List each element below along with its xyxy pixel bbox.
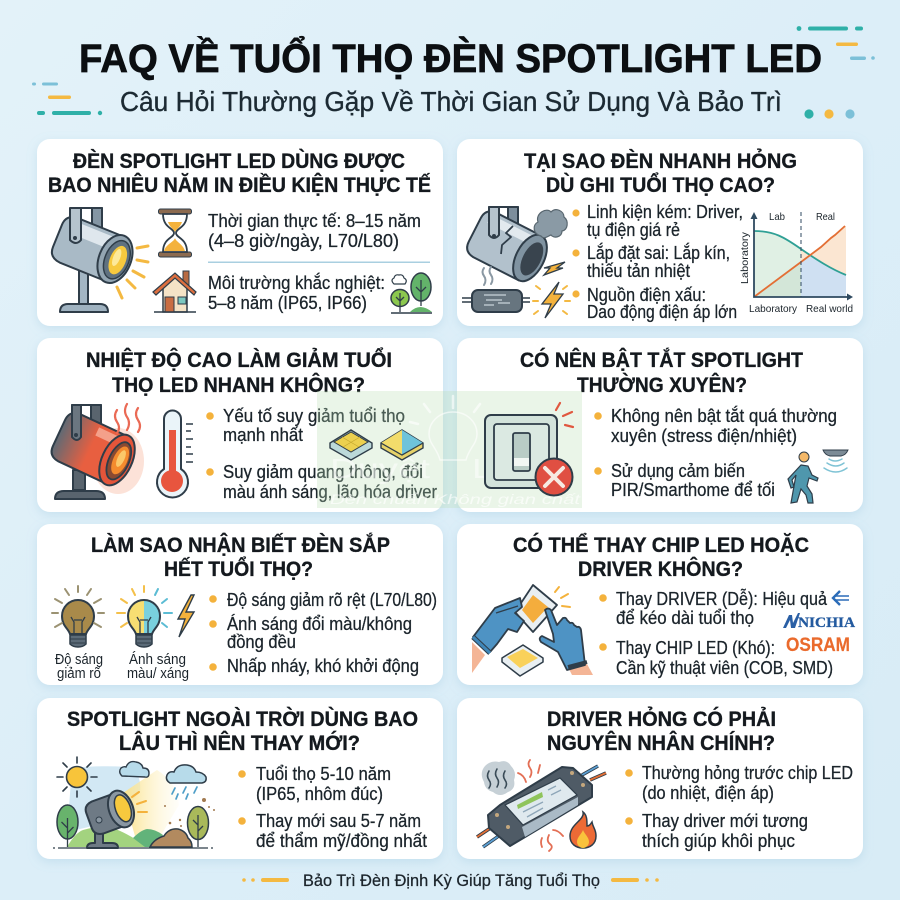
heading: DRIVER KHÔNG? <box>578 557 743 581</box>
panel: why lamps fail early <box>457 139 863 326</box>
heading <box>48 149 431 197</box>
text: real time <box>208 211 421 251</box>
heading: LÀM SAO NHẬN BIẾT ĐÈN SẮP <box>91 533 390 557</box>
caption: dim <box>55 652 103 682</box>
icon: dim bulb <box>52 586 104 647</box>
icon: colour-shift bulb <box>117 586 172 647</box>
heading: HẾT TUỔI THỌ? <box>164 557 313 581</box>
icon: flicker lightning bolt <box>178 595 194 637</box>
caption: dim: giảm rõ <box>57 666 101 682</box>
heading <box>67 707 418 755</box>
panel: driver failure <box>457 698 863 859</box>
text: driver list: Thường hỏng trước chip LED <box>642 763 853 783</box>
text: replacement list <box>599 588 833 678</box>
text: real time: Thời gian thực tế: 8–15 năm <box>208 211 421 231</box>
subtitle: Câu Hỏi Thường Gặp Về Thời Gian Sử Dụng Và Bảo Trì <box>120 86 782 117</box>
icon: outdoor scene with spotlight <box>53 757 215 848</box>
text: real time: (4–8 giờ/ngày, L70/L80) <box>208 231 399 251</box>
decorative accents: top left <box>32 82 102 115</box>
icon: spotlight <box>48 208 148 312</box>
watermark: Duyệt <box>330 453 430 484</box>
icon: driver and lightning <box>462 282 570 318</box>
icon: house <box>153 271 196 312</box>
text: switching list <box>594 405 837 500</box>
logo: Nichia <box>783 613 855 631</box>
chart: lab vs real world: Real <box>816 211 835 223</box>
heading: BAO NHIÊU NĂM IN ĐIỀU KIỆN THỰC TẾ <box>48 173 431 197</box>
heading: CÓ NÊN BẬT TẮT SPOTLIGHT <box>520 348 803 372</box>
text: signs list <box>209 590 437 676</box>
heading: NGUYÊN NHÂN CHÍNH? <box>547 731 775 755</box>
heading: TẠI SAO ĐÈN NHANH HỎNG <box>524 149 797 173</box>
text: heat list: mạnh nhất <box>223 425 303 445</box>
panel: real-world lifespan <box>37 139 443 326</box>
heading: SPOTLIGHT NGOÀI TRỜI DÙNG BAO <box>67 707 418 731</box>
heading: DRIVER HỎNG CÓ PHẢI <box>547 707 776 731</box>
heading <box>91 533 390 581</box>
text: outdoor list <box>238 764 427 851</box>
text: driver list <box>625 763 853 851</box>
panel: replacing chip or driver <box>457 524 863 685</box>
heading <box>524 149 797 197</box>
icon: burnt driver <box>477 760 606 851</box>
text: signs list: đồng đều <box>227 632 296 652</box>
icon: walking person with PIR sensor <box>788 450 848 503</box>
text: harsh environment: 5–8 năm (IP65, IP66) <box>208 293 367 313</box>
footer note: Bảo Trì Đèn Định Kỳ Giúp Tăng Tuổi Thọ <box>303 872 600 890</box>
text: outdoor list: Thay mới sau 5-7 năm <box>256 811 421 831</box>
text: replacement list: Cần kỹ thuật viên (COB, SMD) <box>616 658 833 678</box>
watermark <box>317 391 582 508</box>
icon: broken spotlight with smoke <box>463 207 567 287</box>
text: switching list: xuyên (stress điện/nhiệt) <box>611 426 797 446</box>
heading: CÓ THỂ THAY CHIP LED HOẶC <box>513 533 809 557</box>
caption: colour: Ánh sáng <box>129 651 186 668</box>
heading <box>513 533 809 581</box>
text: driver list: thích giúp khôi phục <box>642 831 795 851</box>
text: driver list: Thay driver mới tương <box>642 811 808 831</box>
text: outdoor list: (IP65, nhôm đúc) <box>256 784 383 804</box>
panel: end of life signs <box>37 524 443 685</box>
chart: lab vs real world: Laboratory <box>749 303 798 315</box>
text: causes list: Lắp đặt sai: Lắp kín, <box>587 242 730 263</box>
heading: ĐÈN SPOTLIGHT LED DÙNG ĐƯỢC <box>73 149 405 173</box>
text: signs list: Độ sáng giảm rõ rệt (L70/L80) <box>227 590 437 610</box>
text: causes list: Linh kiện kém: Driver, <box>587 202 743 222</box>
icon: arrow logo <box>833 591 849 605</box>
heading <box>86 348 392 397</box>
text: causes list: tụ điện giá rẻ <box>587 220 680 240</box>
icon: overheated spotlight <box>48 404 144 499</box>
text: signs list: Nhấp nháy, khó khởi động <box>227 656 419 676</box>
chart: lab vs real world: Real world <box>806 303 853 315</box>
text: outdoor list: Tuổi thọ 5-10 năm <box>256 764 391 784</box>
text: switching list: Sử dụng cảm biến <box>611 461 745 481</box>
title: FAQ VỀ TUỔI THỌ ĐÈN SPOTLIGHT LED <box>79 34 822 81</box>
icon: wall switch with cross <box>485 403 573 496</box>
heading: LÂU THÌ NÊN THAY MỚI? <box>119 731 360 755</box>
panel: heat <box>37 338 443 512</box>
icon: trees and cloud <box>391 273 432 313</box>
text: causes list: Nguồn điện xấu: <box>587 285 706 305</box>
caption: colour <box>127 651 189 682</box>
heading: DÙ GHI TUỔI THỌ CAO? <box>546 173 775 197</box>
text: replacement list: Thay CHIP LED (Khó): <box>616 638 775 658</box>
heading <box>547 707 776 755</box>
chart: lab vs real world: Laboratory <box>739 231 751 284</box>
icon: LED chips <box>330 430 423 460</box>
text: signs list: Ánh sáng đổi màu/không <box>227 614 412 634</box>
chart: lab vs real world <box>739 211 853 315</box>
logo: Nichia: NICHIA <box>798 615 855 631</box>
text: heat list: màu ánh sáng, lão hóa driver <box>223 482 437 502</box>
chart: lab vs real world: Lab <box>769 211 785 223</box>
text: harsh environment: Môi trường khắc nghiệt: <box>208 272 385 293</box>
icon: gloved hands holding LED chip <box>472 585 593 676</box>
text: heat list: Yếu tố suy giảm tuổi thọ <box>223 406 405 426</box>
text: causes list <box>572 202 743 322</box>
text: driver list: (do nhiệt, điện áp) <box>642 783 774 803</box>
panel: switching <box>457 338 863 512</box>
text: switching list: PIR/Smarthome để tối <box>611 480 775 500</box>
logo: Osram: OSRAM <box>786 635 850 656</box>
text: outdoor list: để thẩm mỹ/đồng nhất <box>256 831 427 851</box>
text: replacement list: Thay DRIVER (Dễ): Hiệu quả <box>616 588 828 609</box>
heading: THỌ LED NHANH KHÔNG? <box>112 373 365 397</box>
decorative accents: top right <box>797 26 875 119</box>
icon: thermometer <box>157 410 193 497</box>
text: heat list: Suy giảm quang thông, đổi <box>223 462 423 482</box>
text: replacement list: để kéo dài tuổi thọ <box>616 608 754 628</box>
heading: THƯỜNG XUYÊN? <box>577 373 747 397</box>
panel: outdoor spotlight <box>37 698 443 859</box>
text: switching list: Không nên bật tắt quá thường <box>611 405 837 426</box>
text: harsh environment <box>208 272 385 313</box>
heading: NHIỆT ĐỘ CAO LÀM GIẢM TUỔI <box>86 348 392 372</box>
watermark: Đèn chuẩn Không gian chất <box>330 491 582 507</box>
watermark: Lights <box>472 453 572 484</box>
text: causes list: Dao động điện áp lớn <box>587 302 737 322</box>
heading <box>520 348 803 397</box>
icon: hourglass <box>158 209 192 257</box>
text: heat list <box>206 406 437 502</box>
caption: dim: Độ sáng <box>55 652 103 668</box>
caption: colour: màu/ xáng <box>127 666 189 682</box>
text: causes list: thiếu tản nhiệt <box>587 261 690 281</box>
